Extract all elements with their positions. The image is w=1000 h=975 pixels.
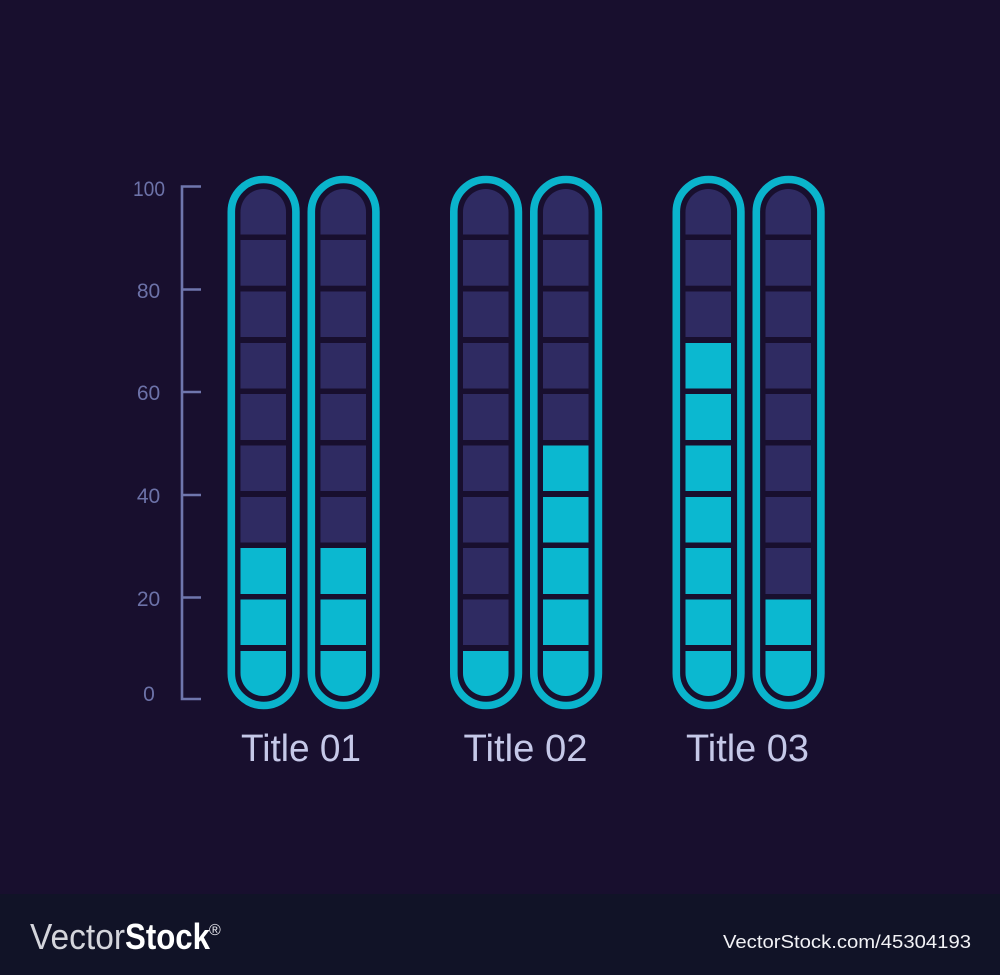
- bar: Title 01 right, value 30: [311, 180, 376, 706]
- logo: registered mark: ®: [209, 922, 221, 939]
- logo: Vector: Vector: [30, 916, 125, 957]
- label: Title 03: Title 03: [686, 728, 809, 770]
- group: Title 03: [676, 180, 821, 770]
- footer bar: [0, 894, 1000, 975]
- y axis: 60: [137, 382, 160, 405]
- y axis: 100: [133, 178, 165, 201]
- bar: Title 01 left, value 30: [231, 180, 296, 706]
- bar: Title 02 right, value 50: [534, 180, 598, 706]
- label: Title 01: Title 01: [241, 728, 361, 770]
- y axis: 40: [137, 485, 160, 508]
- y axis: [133, 178, 201, 706]
- y axis: 0: [143, 683, 155, 706]
- image id: VectorStock.com/45304193: [723, 932, 971, 952]
- y axis: 80: [137, 280, 160, 303]
- group: Title 02: [454, 180, 598, 770]
- bar: Title 02 left, value 10: [454, 180, 518, 706]
- group: Title 01: [231, 180, 376, 770]
- label: Title 02: Title 02: [464, 728, 588, 770]
- bar: Title 03 right, value 20: [756, 180, 821, 706]
- bar: Title 03 left, value 70: [676, 180, 741, 706]
- y axis: 20: [137, 588, 160, 611]
- logo: Stock: Stock: [125, 916, 211, 957]
